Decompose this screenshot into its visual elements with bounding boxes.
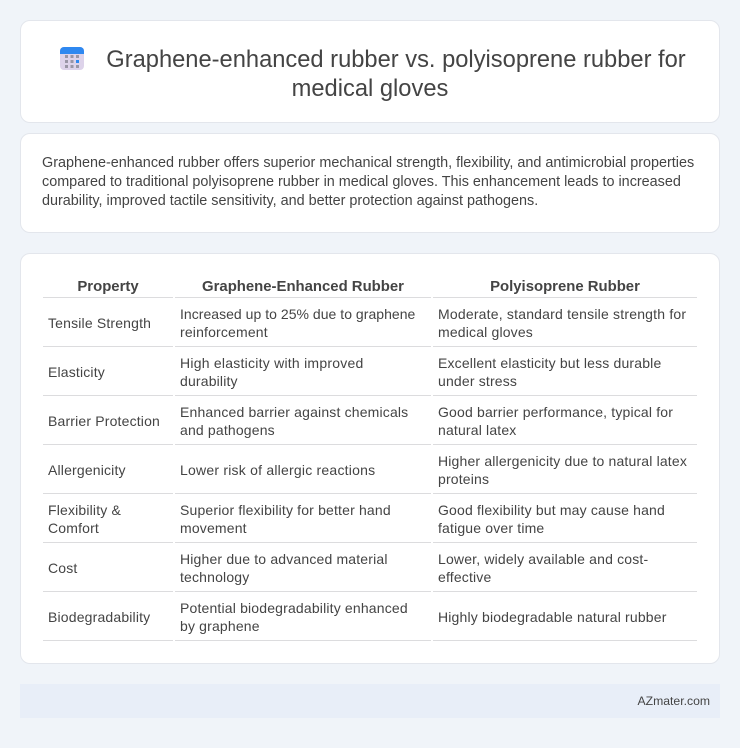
row: elasticity — [48, 355, 661, 389]
summary text: durability, improved tactile sensitivity, and better protection against pathogens. — [42, 193, 538, 209]
row: biodegradability: Potential biodegradability enhanced — [180, 600, 408, 616]
summary text — [42, 155, 694, 209]
row: barrier protection: natural latex — [438, 422, 516, 438]
row: barrier protection: Barrier Protection — [48, 413, 160, 429]
row: elasticity: Elasticity — [48, 364, 105, 380]
row: cost: effective — [438, 569, 491, 585]
row: barrier protection — [48, 404, 673, 438]
row: barrier protection: Enhanced barrier against chemicals — [180, 404, 408, 420]
summary text: compared to traditional polyisoprene rubber in medical gloves. This enhancement leads to increased — [42, 174, 681, 190]
row: elasticity: High elasticity with improved — [180, 355, 364, 371]
row: cost — [48, 551, 648, 585]
row: biodegradability: by graphene — [180, 618, 260, 634]
panel: title card — [20, 20, 720, 123]
row: allergenicity: Lower risk of allergic reactions — [180, 462, 375, 478]
row: tensile strength: medical gloves — [438, 324, 533, 340]
row: allergenicity: Allergenicity — [48, 462, 126, 478]
row: tensile strength: Increased up to 25% due to graphene — [180, 306, 415, 322]
row: biodegradability — [48, 600, 667, 634]
row: flexibility and comfort: movement — [180, 520, 247, 536]
icon: calendar grid — [60, 47, 84, 70]
row: flexibility and comfort: Comfort — [48, 520, 99, 536]
row: cost: Cost — [48, 560, 77, 576]
row: flexibility and comfort: fatigue over time — [438, 520, 544, 536]
panel: comparison table card — [20, 253, 720, 664]
panel: summary card — [20, 133, 720, 233]
row: flexibility and comfort: Superior flexibility for better hand — [180, 502, 391, 518]
row: biodegradability: Biodegradability — [48, 609, 150, 625]
row: flexibility and comfort — [48, 502, 665, 536]
row: tensile strength: reinforcement — [180, 324, 268, 340]
table header: polyisoprene rubber: Polyisoprene Rubber — [490, 279, 640, 295]
table header: property: Property — [77, 279, 139, 295]
row: elasticity: Excellent elasticity but less durable — [438, 355, 661, 371]
row: elasticity: durability — [180, 373, 238, 389]
row: cost: technology — [180, 569, 249, 585]
row: allergenicity — [48, 453, 687, 487]
row: tensile strength: Moderate, standard tensile strength for — [438, 306, 686, 322]
row: barrier protection: and pathogens — [180, 422, 275, 438]
footer source text: AZmater.com — [638, 694, 710, 708]
row: flexibility and comfort: Flexibility & — [48, 502, 121, 518]
row: cost: Higher due to advanced material — [180, 551, 388, 567]
row: tensile strength — [48, 306, 686, 340]
row: cost: Lower, widely available and cost- — [438, 551, 648, 567]
row: allergenicity: proteins — [438, 471, 489, 487]
title: Graphene-enhanced rubber vs. polyisoprene rubber for — [106, 47, 686, 73]
row: tensile strength: Tensile Strength — [48, 315, 151, 331]
row: biodegradability: Highly biodegradable natural rubber — [438, 609, 667, 625]
row: elasticity: under stress — [438, 373, 517, 389]
row: barrier protection: Good barrier performance, typical for — [438, 404, 673, 420]
title second line: medical gloves — [292, 76, 448, 102]
summary text: Graphene-enhanced rubber offers superior mechanical strength, flexibility, and antimicrobial properties — [42, 155, 694, 171]
row: flexibility and comfort: Good flexibility but may cause hand — [438, 502, 665, 518]
footer bar — [20, 684, 720, 718]
row: allergenicity: Higher allergenicity due to natural latex — [438, 453, 687, 469]
table header: graphene-enhanced rubber: Graphene-Enhanced Rubber — [202, 279, 404, 295]
